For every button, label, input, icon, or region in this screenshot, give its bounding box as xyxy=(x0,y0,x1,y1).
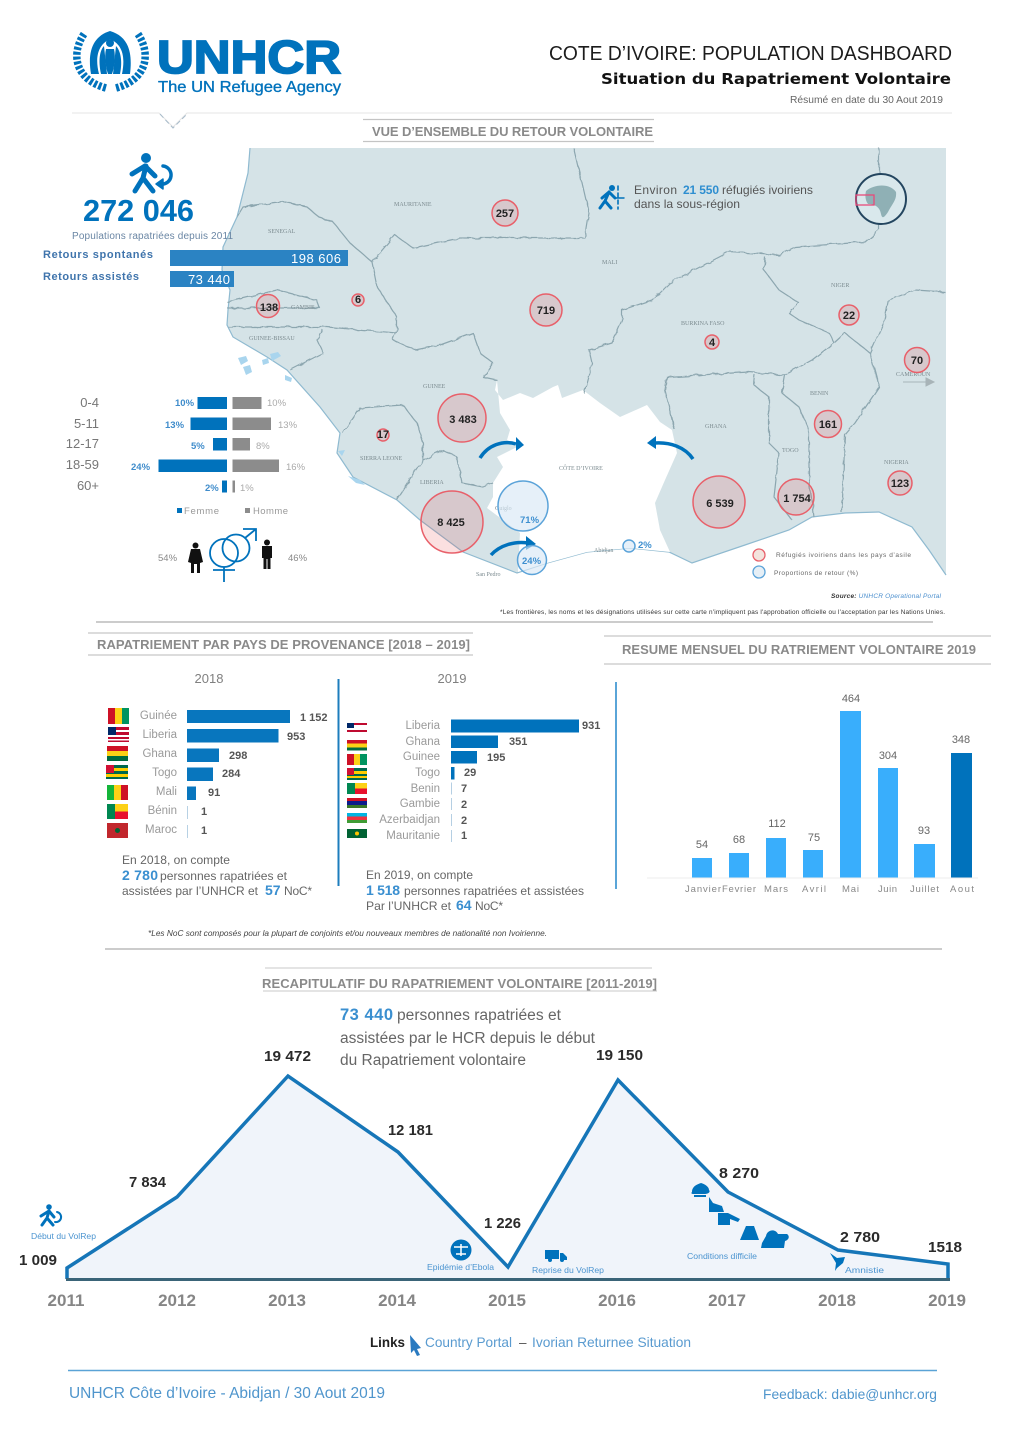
map: country labels: San Pedro xyxy=(476,572,500,578)
footer: feedback: Feedback: dabie@unhcr.org xyxy=(763,1386,937,1402)
map: west africa xyxy=(222,148,946,578)
age labels: 5-11 xyxy=(74,416,99,431)
text: 2019 summary xyxy=(366,868,584,913)
chart: returns 2011-2019 area xyxy=(19,1047,966,1310)
yearly values: 8 270 xyxy=(719,1165,759,1182)
male values: 13% xyxy=(278,420,298,431)
map: refugee values: 8 425 xyxy=(437,517,465,529)
map: country labels: MALI xyxy=(602,260,617,266)
values 2019: 29 xyxy=(464,767,476,779)
values 2019: 1 xyxy=(461,830,467,842)
map: refugee values: 6 xyxy=(355,294,361,306)
year labels: 2016 xyxy=(598,1291,636,1310)
map legend: Réfugiés ivoiriens dans les pays d’asile xyxy=(776,552,911,559)
year labels: 2012 xyxy=(158,1291,196,1310)
map: refugee values: 161 xyxy=(819,419,837,431)
icon: landslide xyxy=(709,1197,724,1212)
female bars xyxy=(158,397,227,492)
text: 2018 summary: 2 780 xyxy=(122,867,158,883)
map: refugee values: 3 483 xyxy=(449,414,477,426)
yearly values: 19 472 xyxy=(264,1048,311,1065)
icon: boat on flood xyxy=(761,1230,789,1248)
monthly values: 464 xyxy=(842,693,860,705)
annotation: debut du volrep xyxy=(31,1204,96,1241)
month labels: Mai xyxy=(842,884,859,895)
icon: gender symbols xyxy=(210,529,256,582)
sex ratio: 46% xyxy=(288,553,308,564)
values 2018: 284 xyxy=(222,768,241,780)
map: coastline xyxy=(222,148,946,575)
labels 2019: Mauritanie xyxy=(386,830,440,842)
text: 2018 summary: assistées par l’UNHCR et xyxy=(122,884,259,898)
text: total assisted xyxy=(340,1006,596,1069)
map: refugee values: 22 xyxy=(843,310,855,322)
bars: types of return: Retours spontanés xyxy=(43,249,153,261)
monthly values: 68 xyxy=(733,834,745,846)
map: country labels: Abidjan xyxy=(594,548,613,554)
map: country labels: MAURITANIE xyxy=(394,202,432,208)
icon: storm cloud xyxy=(691,1183,710,1197)
text: total assisted: du Rapatriement volontaire xyxy=(340,1052,526,1069)
stat: total returnees: 272 046 xyxy=(83,193,194,228)
age labels: 12-17 xyxy=(66,436,99,451)
year labels: 2017 xyxy=(708,1291,746,1310)
legend: Homme xyxy=(253,506,288,517)
bars: types of return: 198 606 xyxy=(291,251,341,266)
text: 2018 summary: personnes rapatriées et xyxy=(160,869,288,883)
month labels: Juillet xyxy=(910,884,939,895)
links: Country Portal xyxy=(425,1334,512,1350)
logo: UNHCR: UNHCR xyxy=(157,31,341,83)
heading: resume mensuel xyxy=(604,636,991,664)
callout: refugees in sub-region: 21 550 xyxy=(683,183,719,197)
map: west africa: 71% xyxy=(520,515,540,526)
text: 2019 summary: 1 518 xyxy=(366,882,400,898)
map: country labels: TOGO xyxy=(782,448,799,454)
map disclaimer: *Les frontières, les noms et les désignations utilisées sur cette carte n'impliquent pas l'approbation officielle ou l'acceptation par les Nations Unies. xyxy=(500,609,945,616)
age labels: 60+ xyxy=(77,478,99,493)
female values xyxy=(131,398,219,494)
annotation: amnesty xyxy=(830,1253,884,1275)
bars 2019 xyxy=(451,720,579,842)
map: refugee values: 719 xyxy=(537,305,555,317)
male bars xyxy=(232,397,279,492)
map: country labels: BENIN xyxy=(810,391,829,397)
map: refugee values xyxy=(260,208,923,529)
icon: returning walker xyxy=(132,153,171,191)
yearly values: 7 834 xyxy=(129,1174,167,1191)
year labels: 2015 xyxy=(488,1291,526,1310)
heading: recapitulatif: RECAPITULATIF DU RAPATRIEMENT VOLONTAIRE [2011-2019] xyxy=(262,976,657,991)
map: country labels: NIGER xyxy=(831,283,849,289)
map: country labels: SENEGAL xyxy=(268,229,296,235)
map: country labels: BURKINA FASO xyxy=(681,321,725,327)
annotation: reprise du volrep xyxy=(532,1250,604,1275)
flags 2018 xyxy=(106,708,129,838)
values 2019: 2 xyxy=(461,815,467,827)
monthly values: 75 xyxy=(808,832,820,844)
month labels: Avril xyxy=(802,884,826,895)
labels 2018: Togo xyxy=(152,767,177,779)
chart: age and sex pyramid xyxy=(66,395,306,517)
monthly values: 112 xyxy=(768,818,786,830)
labels 2019 xyxy=(379,720,441,842)
female values: 13% xyxy=(165,420,185,431)
map: return arrows xyxy=(480,436,693,555)
male values xyxy=(240,398,306,494)
map: refugee values: 6 539 xyxy=(706,498,734,510)
values 2019: 351 xyxy=(509,736,527,748)
chart: returns by country 2019: 2019 xyxy=(438,671,466,686)
text: 2018 summary: En 2018, on compte xyxy=(122,853,230,867)
callout: refugees in sub-region: dans la sous-région xyxy=(634,197,740,211)
callout: refugees in sub-region: réfugiés ivoiriens xyxy=(722,183,813,197)
labels 2018 xyxy=(140,710,178,836)
annotation: amnesty: Amnistie xyxy=(845,1265,884,1275)
year labels: 2019 xyxy=(928,1291,966,1310)
map: country labels: GUINEE-BISSAU xyxy=(249,336,295,342)
footer: office: UNHCR Côte d’Ivoire - Abidjan / 30 Aout 2019 xyxy=(69,1385,385,1402)
icon: returning walker small xyxy=(41,1204,61,1225)
month labels: Aout xyxy=(950,884,974,895)
logo: UNHCR: The UN Refugee Agency xyxy=(158,79,341,96)
values 2019: 931 xyxy=(582,720,600,732)
heading: vue d'ensemble: VUE D’ENSEMBLE DU RETOUR VOLONTAIRE xyxy=(372,124,653,139)
yearly values: 1 009 xyxy=(19,1252,57,1269)
values 2018: 953 xyxy=(287,731,305,743)
map: refugee values: 70 xyxy=(911,355,923,367)
title: COTE D’IVOIRE: POPULATION DASHBOARD xyxy=(549,43,952,65)
month labels: Janvier xyxy=(685,884,721,895)
text: 2019 summary: NoC* xyxy=(475,899,503,913)
map: country labels: LIBERIA xyxy=(420,480,444,486)
icon: fleeing person xyxy=(600,185,624,209)
year labels: 2013 xyxy=(268,1291,306,1310)
values 2019 xyxy=(461,720,600,842)
month labels: Mars xyxy=(764,884,788,895)
labels 2018: Liberia xyxy=(142,729,178,741)
annotation: debut du volrep: Début du VolRep xyxy=(31,1231,96,1241)
icon: road obstacle xyxy=(740,1226,759,1240)
yearly values: 19 150 xyxy=(596,1047,643,1064)
map: refugee values: 1 754 xyxy=(783,493,812,505)
inset: globe locator xyxy=(856,174,906,224)
map legend xyxy=(753,549,911,578)
map: west africa: 24% xyxy=(522,556,542,567)
icon: dove xyxy=(830,1253,845,1271)
stat: total returnees xyxy=(72,153,233,242)
heading: rapatriement par pays xyxy=(88,633,473,655)
labels 2019: Guinee xyxy=(403,751,440,763)
map: country labels: Guiglo xyxy=(495,506,512,512)
text: 2019 summary: 64 xyxy=(456,897,472,913)
age labels: 0-4 xyxy=(80,395,99,410)
map legend: Proportions de retour (%) xyxy=(774,570,858,577)
heading: vue d'ensemble xyxy=(363,120,654,142)
icon: UNHCR emblem xyxy=(77,31,145,88)
month labels: Juin xyxy=(878,884,897,895)
chart: returns by country 2018: 2018 xyxy=(195,671,223,686)
map: Cote d'Ivoire in white xyxy=(487,380,677,572)
callout: refugees in sub-region: Environ xyxy=(634,183,677,197)
age labels: 18-59 xyxy=(66,457,99,472)
monthly values: 304 xyxy=(879,750,897,762)
text: total assisted: 73 440 xyxy=(340,1006,393,1024)
annotation: ebola epidemic xyxy=(427,1240,494,1272)
icon: cursor xyxy=(410,1335,421,1356)
monthly values: 348 xyxy=(952,734,970,746)
map: refugee values: 4 xyxy=(709,337,716,349)
chart: returns by country 2018 xyxy=(106,671,328,838)
map land xyxy=(222,148,946,575)
date: Résumé en date du 30 Aout 2019 xyxy=(790,95,943,106)
female values: 24% xyxy=(131,462,151,473)
values 2018: 298 xyxy=(229,750,247,762)
map: refugee values: 257 xyxy=(496,208,514,220)
legend xyxy=(177,506,288,517)
values 2019: 195 xyxy=(487,752,505,764)
labels 2018: Bénin xyxy=(148,805,177,817)
map: refugee values: 17 xyxy=(377,429,389,441)
icon: biohazard xyxy=(450,1240,472,1260)
map: country labels: SIERRA LEONE xyxy=(360,456,403,462)
map: islands and river xyxy=(238,352,365,485)
values 2019: 2 xyxy=(461,799,467,811)
annotation: difficult conditions: Conditions difficile xyxy=(687,1251,757,1261)
map: country borders xyxy=(227,148,945,520)
map: country labels: CÔTE D’IVOIRE xyxy=(559,464,603,472)
map: return proportion circles xyxy=(498,481,635,574)
text: 2018 summary: 57 xyxy=(265,882,281,898)
labels 2018: Maroc xyxy=(145,824,177,836)
links: Ivorian Returnee Situation xyxy=(532,1334,691,1350)
labels 2019: Ghana xyxy=(405,736,441,748)
labels 2019: Gambie xyxy=(400,798,440,810)
bars 2018 xyxy=(187,710,290,838)
chart: monthly returns 2019 xyxy=(647,693,978,895)
labels 2019: Azerbaidjan xyxy=(379,814,440,826)
sex ratio xyxy=(158,529,308,582)
bars: types of return: 73 440 xyxy=(188,272,230,287)
labels 2018: Guinée xyxy=(140,710,177,722)
female values: 5% xyxy=(191,441,205,452)
text: 2019 summary: En 2019, on compte xyxy=(366,868,473,882)
month labels: Fevrier xyxy=(722,884,756,895)
logo: UNHCR xyxy=(77,31,341,96)
callout: refugees in sub-region xyxy=(600,183,813,211)
source: Source: UNHCR Operational Portal xyxy=(831,593,942,600)
labels 2019: Togo xyxy=(415,767,440,779)
chart: returns by country 2019 xyxy=(347,671,600,842)
yearly values: 1 226 xyxy=(484,1215,521,1232)
map: west africa: 2% xyxy=(638,540,652,551)
map: refugee values: 138 xyxy=(260,302,278,314)
links: – xyxy=(519,1335,527,1350)
values 2019: 7 xyxy=(461,783,467,795)
year labels xyxy=(48,1291,966,1310)
male values: 8% xyxy=(256,441,270,452)
yearly values xyxy=(19,1047,962,1269)
monthly values: 93 xyxy=(918,825,930,837)
stat: total returnees: Populations rapatriées depuis 2011 xyxy=(72,231,233,242)
values 2018: 91 xyxy=(208,787,220,799)
icon: woman xyxy=(188,542,203,573)
heading: resume mensuel: RESUME MENSUEL DU RATRIEMENT VOLONTAIRE 2019 xyxy=(622,642,976,657)
labels 2019: Benin xyxy=(411,783,440,795)
male values: 16% xyxy=(286,462,306,473)
yearly values: 1518 xyxy=(928,1239,962,1256)
map: country labels: GAMBIE xyxy=(291,305,315,311)
icon: flood vehicle xyxy=(718,1213,740,1225)
values 2018: 1 xyxy=(201,806,207,818)
map: country labels: GHANA xyxy=(705,424,727,430)
links: Links xyxy=(370,1335,405,1350)
map: country labels xyxy=(249,202,931,578)
text: total assisted: assistées par le HCR depuis le début xyxy=(340,1030,596,1047)
links xyxy=(370,1334,691,1356)
bars: types of return xyxy=(43,249,348,287)
labels 2018: Mali xyxy=(156,786,177,798)
male values: 10% xyxy=(267,398,287,409)
flags 2019 xyxy=(347,723,367,838)
icon: man xyxy=(262,540,272,569)
values 2018 xyxy=(201,712,328,837)
text: 2018 summary xyxy=(122,853,312,898)
annotation: ebola epidemic: Epidémie d’Ebola xyxy=(427,1262,494,1272)
icon: truck xyxy=(545,1250,567,1262)
map: refugee circles xyxy=(256,200,930,553)
subtitle: Situation du Rapatriement Volontaire xyxy=(601,70,951,88)
bars: types of return: Retours assistés xyxy=(43,271,139,283)
labels 2018: Ghana xyxy=(142,748,178,760)
map: country labels: CAMEROUN xyxy=(896,372,931,378)
age labels xyxy=(66,395,99,493)
annotation: reprise du volrep: Reprise du VolRep xyxy=(532,1265,604,1275)
text: 2019 summary: personnes rapatriées et assistées xyxy=(404,884,584,898)
heading: rapatriement par pays: RAPATRIEMENT PAR PAYS DE PROVENANCE [2018 – 2019] xyxy=(97,637,470,652)
text: 2018 summary: NoC* xyxy=(284,884,312,898)
values 2018: 1 152 xyxy=(300,712,328,724)
map: refugee values: 123 xyxy=(891,478,909,490)
female values: 2% xyxy=(205,483,219,494)
sex ratio: 54% xyxy=(158,553,178,564)
month labels xyxy=(685,884,974,895)
map: country labels: NIGERIA xyxy=(884,460,909,466)
map: country labels: GUINEE xyxy=(423,384,446,390)
text: 2019 summary: Par l’UNHCR et xyxy=(366,899,452,913)
text: total assisted: personnes rapatriées et xyxy=(397,1007,562,1024)
legend: Femme xyxy=(184,506,219,517)
year labels: 2014 xyxy=(378,1291,416,1310)
values 2018: 1 xyxy=(201,825,207,837)
year labels: 2011 xyxy=(48,1291,84,1310)
monthly values: 54 xyxy=(696,839,708,851)
female values: 10% xyxy=(175,398,195,409)
arrow: cameroon direction xyxy=(903,378,934,386)
footnote: NoC: *Les NoC sont composés pour la plupart de conjoints et/ou nouveaux membres de nationalité non Ivoirienne. xyxy=(148,929,547,938)
monthly values xyxy=(696,693,970,851)
labels 2019: Liberia xyxy=(405,720,441,732)
yearly values: 2 780 xyxy=(840,1229,880,1246)
yearly values: 12 181 xyxy=(388,1122,433,1139)
annotation: difficult conditions xyxy=(687,1183,789,1261)
year labels: 2018 xyxy=(818,1291,856,1310)
male values: 1% xyxy=(240,483,254,494)
